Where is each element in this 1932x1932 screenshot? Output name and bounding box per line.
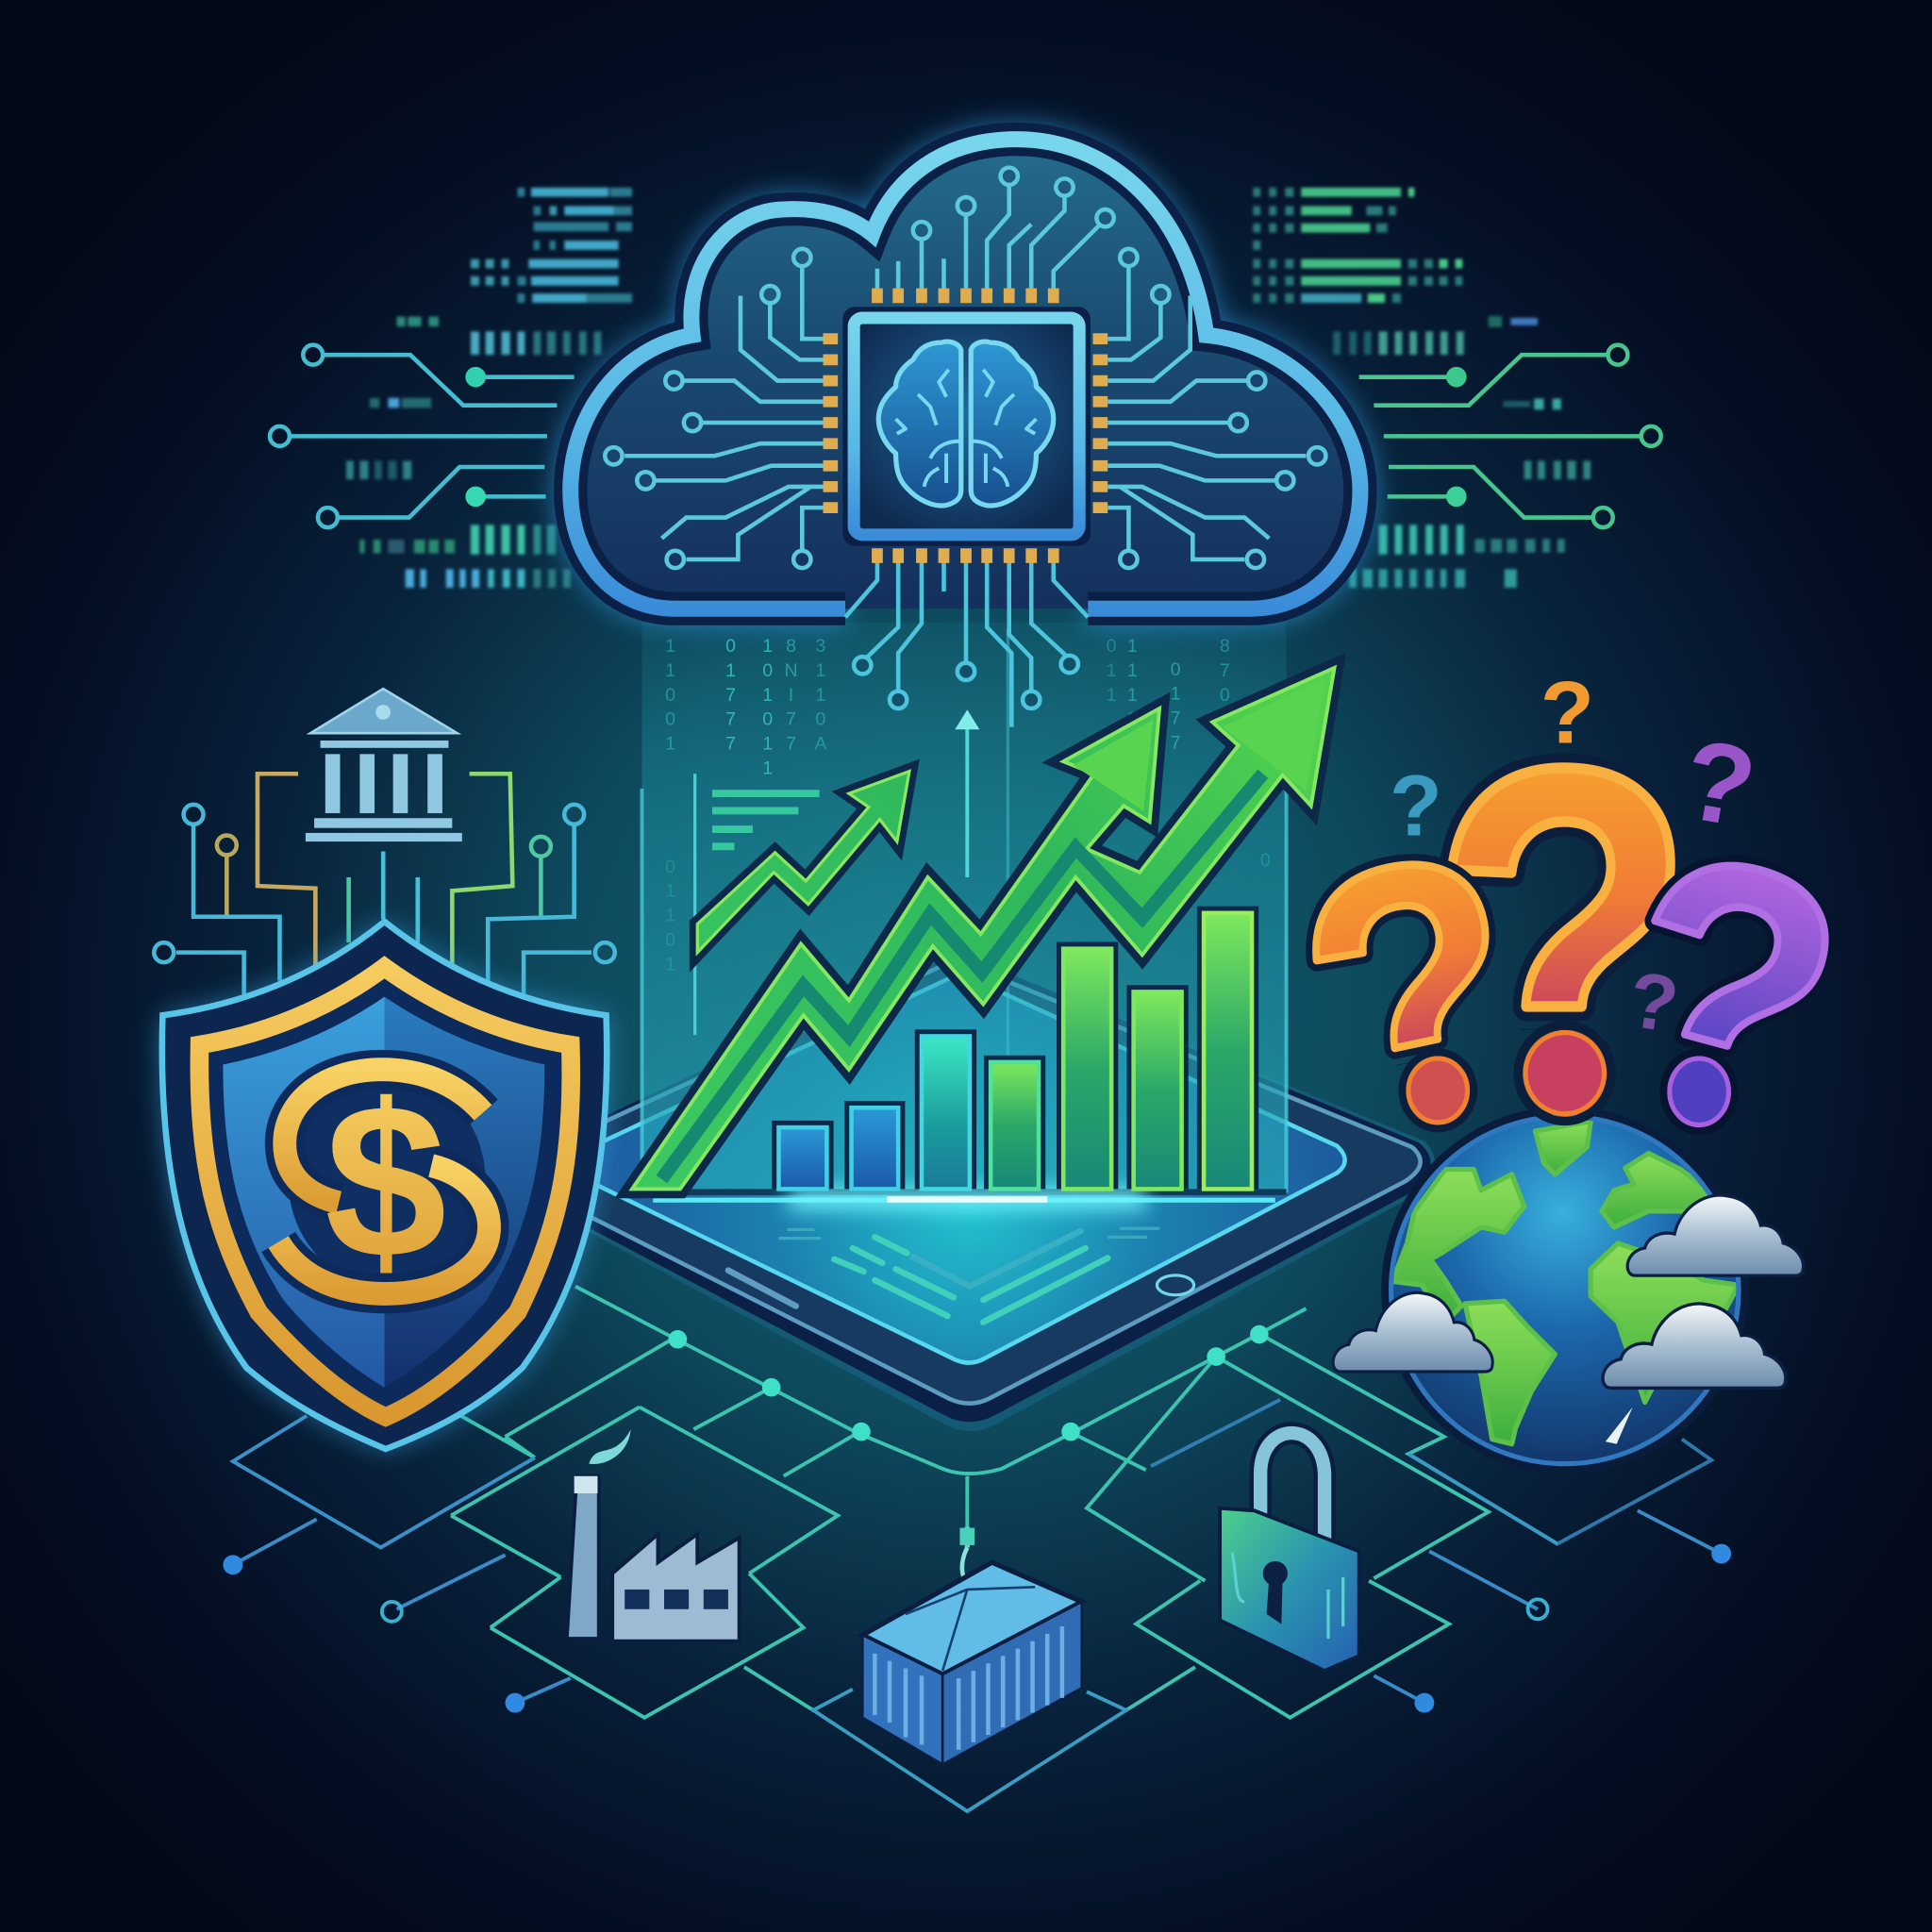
- cloud light band: [571, 140, 1360, 608]
- left orange question mark: ?: [1270, 773, 1557, 1213]
- right purple question mark: [1644, 855, 1829, 1135]
- small question marks: [1390, 663, 1764, 1049]
- binary data columns: 11001: [660, 636, 681, 758]
- continents: [1392, 1122, 1739, 1444]
- shield: [162, 922, 607, 1449]
- cloud right circuit traces: [1108, 249, 1325, 568]
- small question marks: ?: [1390, 758, 1442, 855]
- tablet text lines: [728, 1228, 1194, 1322]
- right purple question mark: ?: [1574, 771, 1879, 1216]
- bank icon: [306, 689, 462, 841]
- shield inner left half: [223, 997, 385, 1388]
- up arrow in beam: [955, 709, 979, 877]
- globe: [1381, 1107, 1748, 1474]
- arrow inner band: [661, 774, 1263, 1179]
- big zigzag arrow: [632, 668, 1335, 1189]
- small question marks: ?: [1674, 715, 1764, 852]
- beam of light: [641, 623, 1287, 1195]
- cloud dark border: [571, 140, 1360, 608]
- large orange question mark: ?: [1432, 668, 1695, 1211]
- shield outer plate: [162, 922, 607, 1449]
- shield inner right half: [385, 997, 544, 1388]
- data bars: upper left: [346, 192, 632, 578]
- shield circuit traces: [154, 774, 615, 997]
- binary data columns: 0177: [1165, 659, 1186, 757]
- arrow heads: [1074, 677, 1325, 810]
- binary data columns: 101011: [758, 636, 778, 782]
- shipping container icon: [862, 1526, 1082, 1764]
- network lines and nodes: [223, 1287, 1731, 1811]
- dollar sign: $: [325, 1059, 446, 1304]
- circuit traces: left: [270, 345, 575, 527]
- tablet body: [499, 959, 1421, 1404]
- binary data columns: 870: [1214, 636, 1235, 709]
- binary data columns: 3110A: [810, 636, 831, 758]
- left orange question mark: ?: [1270, 773, 1557, 1213]
- left orange question mark: [1306, 854, 1496, 1132]
- binary data columns: [660, 636, 1275, 978]
- brain icon: [878, 341, 1054, 506]
- tablet screen: [555, 974, 1345, 1363]
- dollar S backing: [278, 1070, 490, 1293]
- binary data columns: 1110: [1122, 636, 1142, 734]
- small question marks: ?: [1541, 663, 1594, 762]
- binary data columns: 0: [1255, 850, 1275, 874]
- circuit traces: right: [1359, 345, 1661, 527]
- binary data columns: 01777: [721, 636, 741, 758]
- cloud bottom circuit traces: [845, 562, 1088, 727]
- tablet: [487, 949, 1435, 1431]
- binary data columns: 8NI77: [781, 636, 802, 758]
- bar chart: [778, 913, 1252, 1189]
- chip body: [842, 307, 1091, 546]
- cloud top circuit traces: [877, 168, 1114, 289]
- small chart axis and legend lines: [695, 774, 820, 1035]
- binary data columns: 01101: [660, 857, 681, 978]
- cloud body: [571, 140, 1360, 608]
- chip pins: [823, 289, 1108, 563]
- cloud left circuit traces: [605, 249, 823, 568]
- clouds on globe: [1335, 1197, 1802, 1387]
- small green arrow: [697, 772, 909, 953]
- padlock icon: [1220, 1433, 1359, 1671]
- question marks: [1270, 663, 1879, 1216]
- factory icon: [567, 1429, 740, 1641]
- tablet light line: [653, 1189, 1275, 1208]
- large orange question mark: ?: [1432, 668, 1695, 1211]
- shield gold border: [199, 967, 571, 1417]
- binary data columns: 011: [1101, 636, 1122, 709]
- cloud glow: [571, 140, 1360, 608]
- gold S: [278, 1070, 490, 1293]
- small question marks: ?: [1624, 955, 1684, 1049]
- right purple question mark: ?: [1574, 771, 1879, 1216]
- cloud with AI chip: [571, 140, 1360, 727]
- data bars: upper right: [1253, 192, 1591, 578]
